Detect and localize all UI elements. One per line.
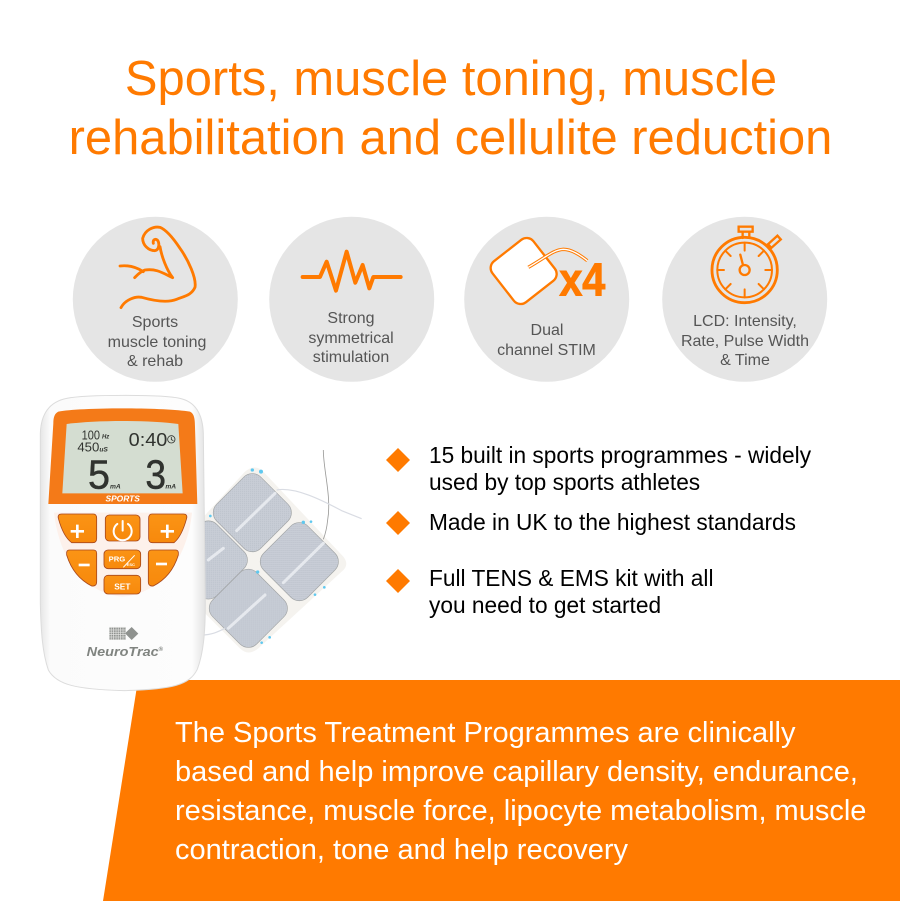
button symbols: PRG [109, 555, 125, 564]
label: LCD: LCD: Intensity, [693, 313, 797, 330]
label: sports muscle toning: & rehab [127, 353, 183, 370]
button halo [54, 513, 192, 597]
bullet 1: used by top sports athletes [429, 469, 700, 495]
label: symmetrical stimulation: symmetrical [308, 330, 394, 347]
label: dual channel: Dual [531, 322, 563, 339]
LCD screen: 100 [82, 427, 100, 442]
NeuroTrac logo: NeuroTrac [87, 644, 159, 659]
label: LCD: Rate, Pulse Width [681, 333, 809, 350]
title: Sports, muscle toning, muscle [125, 52, 777, 106]
orange display surround [48, 408, 197, 504]
buttons [58, 514, 187, 594]
LCD screen [62, 421, 183, 497]
LCD screen: 450 [77, 439, 99, 454]
title: rehabilitation and cellulite reduction [69, 111, 832, 165]
LCD screen: mA [110, 483, 121, 490]
bullet 1 [386, 442, 812, 495]
label: sports muscle toning: Sports [132, 314, 178, 331]
button symbols [71, 525, 174, 592]
LCD screen: 0:40 [129, 429, 167, 450]
panel: symmetrical stimulation [269, 217, 434, 382]
bullet 3 [386, 565, 714, 618]
button symbols: SET [114, 582, 130, 592]
SPORTS label: SPORTS [105, 494, 140, 504]
panel: LCD [662, 217, 827, 382]
banner text: contraction, tone and help recovery [175, 834, 628, 866]
title [69, 52, 832, 165]
label: sports muscle toning [108, 314, 206, 370]
icon: electrode pad x4: x4 [559, 254, 606, 306]
bullet 2: Made in UK to the highest standards [429, 509, 796, 535]
LCD screen: mA [165, 483, 176, 490]
label: symmetrical stimulation: Strong [327, 310, 375, 327]
device: NeuroTrac unit [40, 395, 205, 691]
icon: electrode pad x4 [487, 235, 606, 307]
banner text: resistance, muscle force, lipocyte metabolism, muscle [175, 795, 866, 827]
label: symmetrical stimulation [308, 310, 394, 366]
banner text: The Sports Treatment Programmes are clinically [175, 717, 796, 749]
bullet 3: Full TENS & EMS kit with all [429, 565, 714, 591]
device body [40, 395, 205, 691]
LCD screen: uS [99, 446, 108, 453]
bullet list [386, 442, 812, 618]
LCD screen: 3 [145, 451, 166, 497]
label: LCD [681, 313, 809, 369]
label: symmetrical stimulation: stimulation [313, 349, 389, 366]
panel: dual channel [464, 217, 629, 382]
NeuroTrac logo [87, 627, 164, 659]
electrode pads [164, 450, 362, 652]
icon: stopwatch [712, 227, 781, 303]
button symbols: ESC [127, 562, 135, 567]
icon: flexed arm [120, 227, 195, 308]
banner text [175, 717, 866, 866]
NeuroTrac logo: ® [159, 646, 164, 653]
label: dual channel [497, 322, 596, 359]
LCD screen: Hz [102, 434, 109, 440]
bullet 3: you need to get started [429, 592, 661, 618]
bullet 1: 15 built in sports programmes - widely [429, 442, 812, 468]
icon: pulse wave [303, 252, 401, 291]
label: sports muscle toning: muscle toning [108, 334, 206, 351]
panel: sports muscle toning [73, 217, 238, 382]
banner text: based and help improve capillary density, endurance, [175, 756, 858, 788]
orange banner [103, 680, 900, 901]
label: dual channel: channel STIM [497, 342, 596, 359]
label: LCD: & Time [720, 352, 770, 369]
LCD screen: 5 [88, 451, 110, 497]
